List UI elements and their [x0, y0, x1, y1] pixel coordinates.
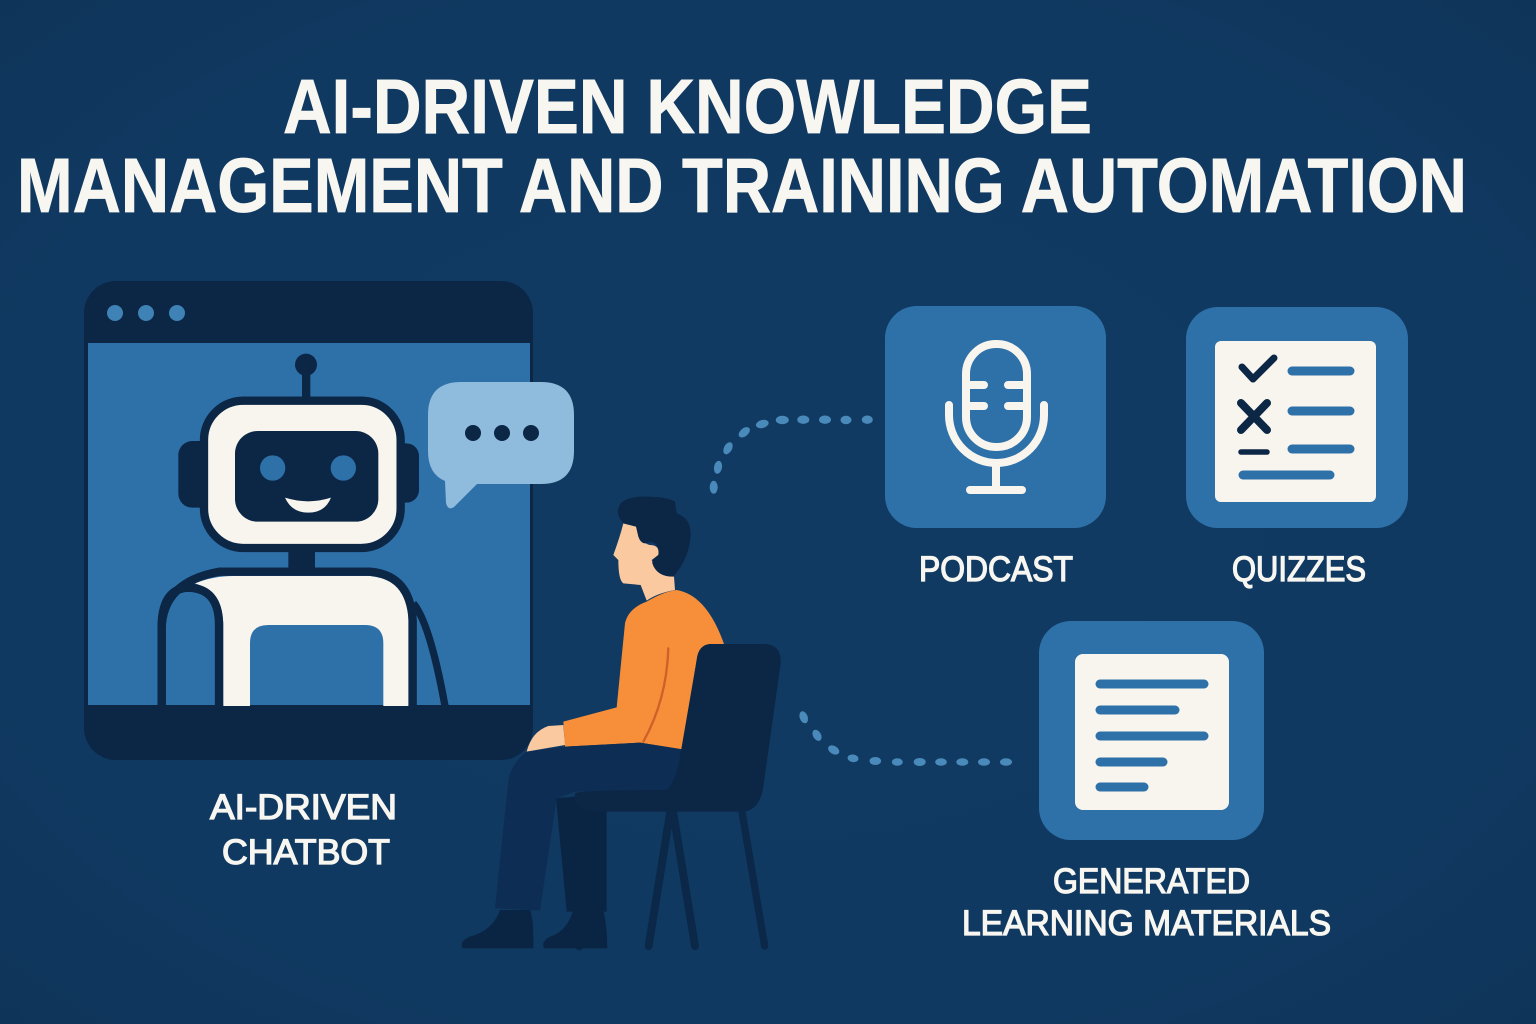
front shoe — [461, 910, 533, 948]
title — [17, 64, 1467, 229]
label: AI-driven chatbot: CHATBOT — [222, 833, 390, 872]
window screen — [88, 343, 530, 705]
chair seat and back — [575, 644, 781, 812]
label: generated learning materials: GENERATED — [1053, 862, 1250, 901]
tile — [885, 306, 1106, 528]
robot antenna — [295, 354, 317, 400]
connector: person to learning materials — [798, 710, 1012, 766]
panel: chatbot window — [84, 281, 574, 760]
robot neck — [288, 548, 315, 573]
hair — [618, 497, 691, 577]
title: AI-DRIVEN KNOWLEDGE — [283, 64, 1092, 150]
robot smile — [285, 498, 331, 513]
robot eyes — [260, 455, 356, 481]
quiz marks — [1241, 358, 1274, 452]
torso and sleeve — [563, 590, 724, 749]
document lines — [1100, 684, 1204, 787]
chair legs — [579, 810, 765, 946]
tile — [1039, 621, 1264, 840]
icon: robot — [162, 354, 445, 706]
hand — [527, 725, 565, 752]
quiz sheet — [1215, 341, 1376, 502]
label: AI-driven chatbot: AI-DRIVEN — [210, 788, 397, 827]
label: quizzes: QUIZZES — [1232, 550, 1366, 589]
robot face — [235, 431, 378, 522]
neck and face — [613, 523, 675, 601]
label: generated learning materials — [962, 862, 1331, 943]
robot head — [204, 401, 401, 548]
window control dots — [107, 305, 185, 321]
rear shoe — [543, 910, 607, 948]
window frame — [84, 281, 533, 760]
panel: generated learning materials — [1039, 621, 1264, 840]
sleeve seam — [643, 648, 668, 742]
rear leg — [556, 797, 607, 912]
document sheet — [1075, 654, 1229, 810]
robot outline and arms — [162, 572, 445, 706]
quiz answer lines — [1243, 371, 1350, 475]
tile — [1186, 307, 1408, 528]
label: podcast: PODCAST — [919, 550, 1073, 589]
speech bubble — [428, 382, 574, 508]
connector: person to podcast — [710, 416, 873, 494]
robot ears — [178, 441, 419, 508]
robot body — [195, 576, 408, 706]
person seated on chair — [461, 497, 781, 948]
label: generated learning materials: LEARNING MATERIALS — [962, 904, 1331, 943]
label: AI-driven chatbot — [210, 788, 397, 872]
trousers — [495, 743, 682, 911]
panel: podcast — [885, 306, 1106, 528]
panel: quizzes — [1186, 307, 1408, 528]
icon: microphone — [949, 344, 1044, 490]
